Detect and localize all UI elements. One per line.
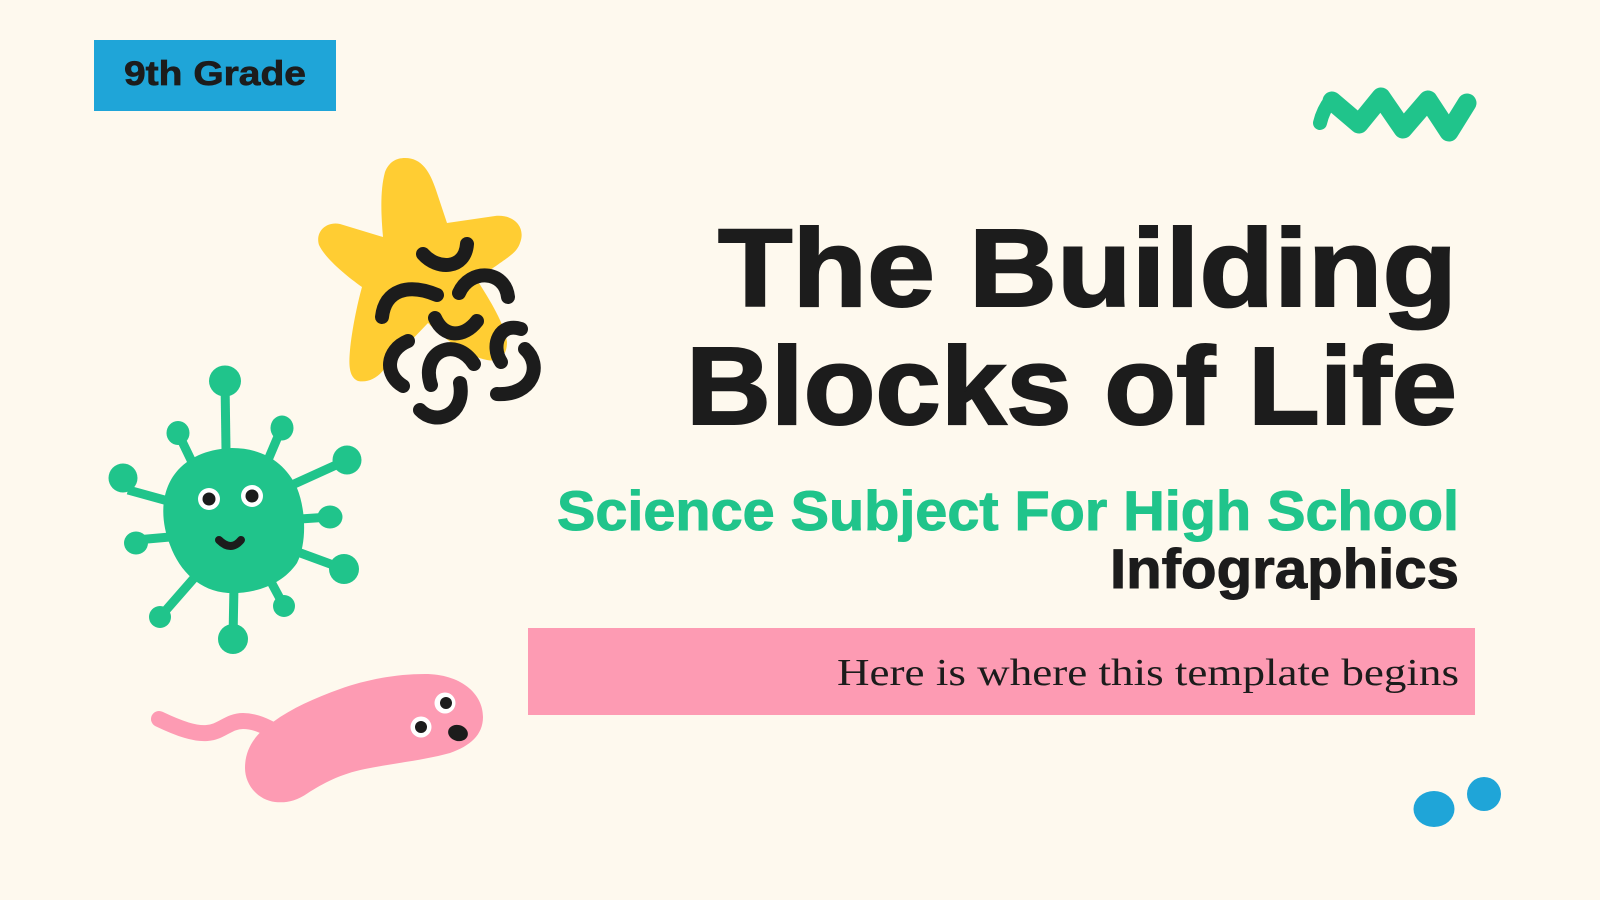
icon: blue dots	[1414, 777, 1501, 827]
title: The Building	[718, 207, 1457, 330]
banner: pink tagline bar	[528, 628, 1475, 715]
icon: green virus	[108, 366, 362, 654]
title: Blocks of Life	[686, 325, 1457, 448]
grade badge	[94, 40, 336, 111]
grade badge: 9th Grade	[124, 55, 306, 93]
title	[686, 207, 1457, 448]
subtitle: science subject: Science Subject For High School	[557, 479, 1459, 542]
icon: pink bacterium	[159, 674, 483, 802]
icon: green zigzag	[1320, 97, 1467, 132]
icon: yellow star cell with black strands	[318, 158, 534, 417]
banner: pink tagline bar: Here is where this template begins	[837, 652, 1459, 694]
subtitle: infographics: Infographics	[1110, 537, 1459, 600]
